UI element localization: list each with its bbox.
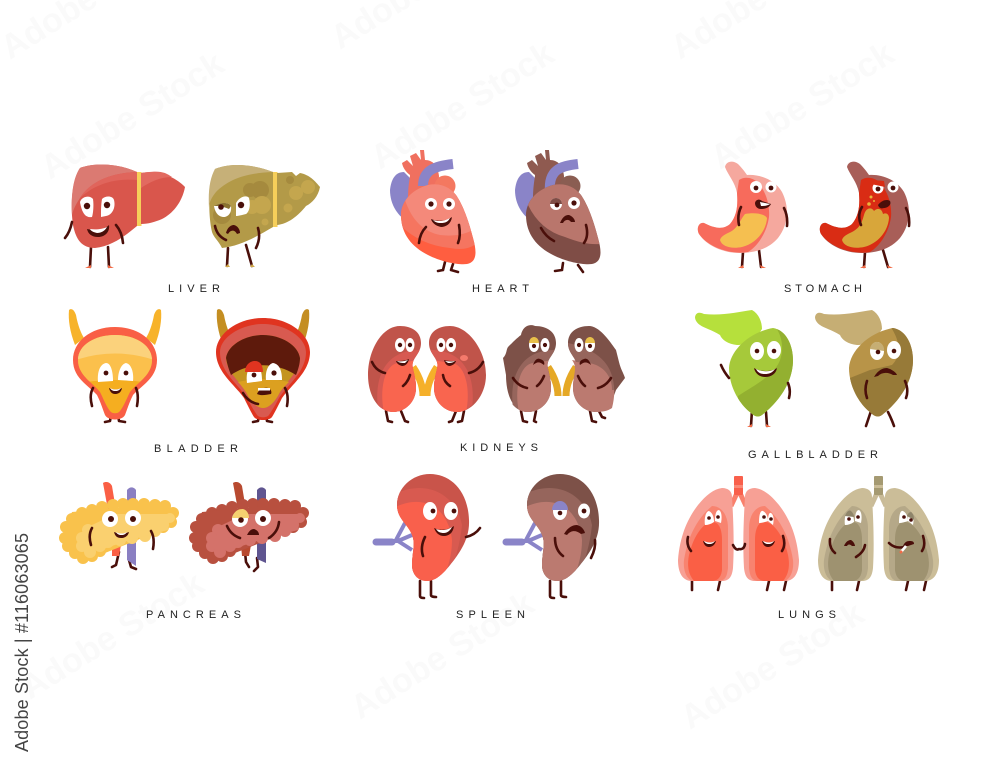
panel: heart: [390, 150, 605, 272]
sick lungs: [818, 476, 939, 590]
sick spleen: [506, 474, 599, 598]
healthy stomach: [698, 162, 787, 268]
label: stomach: STOMACH: [784, 283, 862, 295]
sick kidney right: [566, 326, 625, 422]
healthy pancreas: [59, 482, 179, 569]
sick gallbladder: [815, 310, 920, 426]
healthy heart: [390, 150, 480, 272]
sick liver: [209, 165, 320, 267]
watermark: Adobe Stock: [364, 34, 561, 177]
watermark: Adobe Stock: [14, 564, 211, 707]
label: kidneys: KIDNEYS: [460, 442, 538, 454]
sick bladder: [216, 309, 310, 422]
watermark: Adobe Stock: [704, 34, 901, 177]
panel: stomach: [698, 162, 909, 268]
label: gallbladder: GALLBLADDER: [748, 449, 878, 461]
panel: gallbladder: [695, 310, 920, 427]
sick kidney left: [503, 325, 560, 422]
watermark: Adobe Stock: [674, 594, 871, 737]
panel: pancreas: [59, 482, 309, 571]
panel: lungs: [678, 476, 939, 590]
label: lungs: LUNGS: [778, 609, 836, 621]
healthy spleen: [376, 474, 480, 598]
label: bladder: BLADDER: [154, 443, 238, 455]
healthy gallbladder: [695, 310, 800, 427]
healthy bladder: [69, 309, 161, 422]
healthy liver: [65, 165, 185, 268]
label: heart: HEART: [472, 283, 529, 295]
stock id caption: Adobe Stock | #116063065: [12, 533, 32, 752]
label: spleen: SPLEEN: [456, 609, 525, 621]
sick stomach: [820, 162, 909, 268]
watermark: Adobe Stock: [344, 584, 541, 727]
sick pancreas: [189, 482, 309, 571]
watermark: Adobe Stock: [34, 44, 231, 187]
label: liver: LIVER: [168, 283, 220, 295]
healthy kidney right: [425, 326, 486, 422]
label: pancreas: PANCREAS: [146, 609, 241, 621]
healthy lungs: [678, 476, 799, 590]
panel: bladder: [69, 309, 310, 422]
healthy kidney left: [368, 326, 425, 422]
sick heart: [515, 150, 605, 272]
panel: kidneys: [368, 325, 625, 422]
panel: spleen: [376, 474, 599, 598]
panel: liver: [65, 165, 320, 268]
